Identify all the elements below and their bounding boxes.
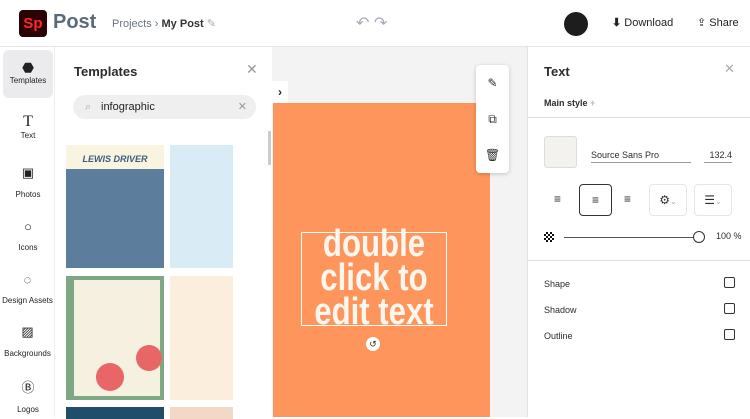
nav: design assets: [2, 272, 53, 305]
search box: infographic: [101, 101, 155, 113]
nav: design assets: Design Assets: [2, 296, 53, 305]
nav: photos: [16, 165, 40, 199]
right text panel: ✕: [724, 61, 735, 76]
canvas area: [272, 47, 527, 417]
undo redo: ↶ ↷: [356, 15, 387, 32]
right text panel: Source Sans Pro: [591, 150, 659, 160]
search box: ✕: [238, 101, 247, 113]
alignment controls: ☰⌄: [704, 193, 722, 207]
nav: text: Text: [21, 131, 35, 140]
left sidebar: [0, 47, 55, 417]
header bar: [0, 0, 750, 47]
nav: text: [20, 113, 36, 140]
options checkboxes: Shadow: [544, 305, 577, 315]
avatar icon: [564, 12, 588, 36]
main style: Main style +: [544, 98, 595, 108]
canvas area: click to: [320, 257, 428, 299]
right text panel: 132.4: [709, 150, 732, 160]
alignment controls: ≡: [592, 193, 599, 207]
opacity slider: [544, 231, 742, 243]
template thumbnails: [66, 145, 233, 419]
right text panel: [527, 47, 750, 417]
nav: design assets: ◌: [24, 272, 31, 287]
nav: backgrounds: ▨: [21, 324, 34, 339]
alignment controls: ≡: [554, 192, 561, 206]
options checkboxes: Outline: [544, 331, 573, 341]
floating toolbar: 🗑: [485, 148, 500, 162]
floating toolbar: ✎: [487, 76, 498, 90]
color swatch and font: [544, 136, 577, 168]
template thumbnails: LEWIS DRIVER: [82, 154, 148, 164]
rotate handle: [366, 337, 380, 351]
text element: [301, 232, 447, 326]
collapse arrow: ›: [278, 85, 282, 99]
templates panel: ✕: [246, 61, 258, 77]
nav: photos: Photos: [16, 190, 40, 199]
search box: [73, 95, 256, 119]
nav: backgrounds: Backgrounds: [4, 349, 51, 358]
floating toolbar: ⧉: [488, 112, 497, 126]
nav: logos: [17, 380, 39, 414]
alignment controls: [554, 184, 732, 216]
nav: icons: Icons: [18, 243, 38, 252]
nav: logos: Logos: [17, 405, 39, 414]
logo: [19, 10, 47, 37]
breadcrumb: Projects › My Post ✎: [112, 18, 216, 30]
opacity slider: 100 %: [716, 231, 742, 241]
canvas area: edit text: [314, 291, 434, 333]
nav: templates: ⬣: [22, 60, 34, 75]
nav: logos: Ⓑ: [21, 380, 34, 395]
scrollbar: [268, 131, 271, 165]
nav: icons: [18, 219, 38, 252]
options checkboxes: [544, 277, 735, 341]
alignment controls: ≡: [624, 192, 631, 206]
logo: Sp: [23, 15, 43, 32]
nav: templates: Templates: [10, 76, 46, 85]
alignment controls: ⚙⌄: [659, 193, 677, 207]
collapse arrow: [272, 81, 288, 103]
nav: templates: [3, 50, 53, 98]
templates panel: [56, 47, 272, 417]
canvas area: double: [323, 223, 425, 265]
download button: ⬇ Download: [612, 17, 673, 29]
share button: ⇪ Share: [697, 17, 739, 29]
panel heading: Text: [544, 64, 570, 79]
nav: photos: ▣: [22, 165, 34, 180]
nav: text: T: [23, 113, 33, 130]
app name: Post: [53, 11, 96, 33]
floating toolbar: [476, 65, 509, 173]
nav: backgrounds: [4, 324, 51, 358]
orange poster: [273, 103, 490, 417]
panel title: Templates: [74, 64, 137, 79]
search box: ⌕: [85, 101, 91, 113]
nav: icons: ○: [24, 219, 32, 234]
options checkboxes: Shape: [544, 279, 570, 289]
rotate handle: ↺: [369, 339, 377, 349]
